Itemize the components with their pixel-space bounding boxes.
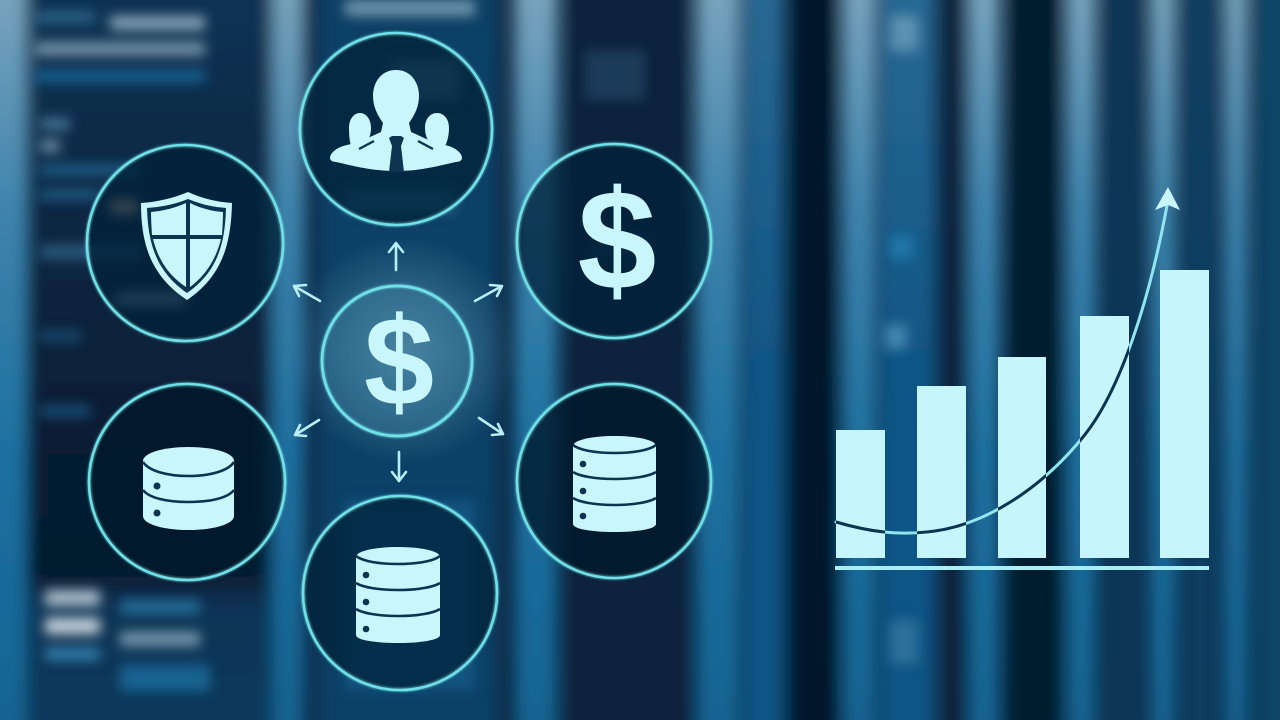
icon: center dollar sign: $ (364, 291, 434, 432)
circle: dollar large (517, 144, 711, 338)
arrow: lower right (479, 418, 503, 435)
arrow: upper right (475, 285, 502, 301)
circle: shield (87, 145, 283, 341)
arrow head (1155, 187, 1180, 210)
arrow: lower left (295, 420, 319, 436)
arrows from hub (294, 243, 503, 481)
bars (836, 270, 1209, 558)
circle: center dollar (322, 286, 472, 436)
arrow: upper left (294, 285, 320, 301)
circle: database bottom (303, 496, 497, 690)
circle: database left (89, 384, 285, 580)
circle: people / team (300, 33, 492, 225)
icon: database two tiers (143, 447, 234, 530)
arrow: down (392, 452, 406, 481)
icon: dollar sign: $ (578, 161, 656, 320)
icon: shield with cross (141, 192, 232, 300)
icon: database three tiers bottom (356, 547, 440, 643)
growth bar chart (835, 187, 1209, 570)
circle diagram: money flow hub (87, 33, 711, 690)
arrow: up (389, 243, 403, 270)
circle: database right (517, 384, 711, 578)
growth curve (836, 200, 1168, 533)
chart baseline (835, 566, 1209, 570)
icon: database three tiers right (573, 436, 656, 532)
icon: business team (330, 70, 462, 172)
